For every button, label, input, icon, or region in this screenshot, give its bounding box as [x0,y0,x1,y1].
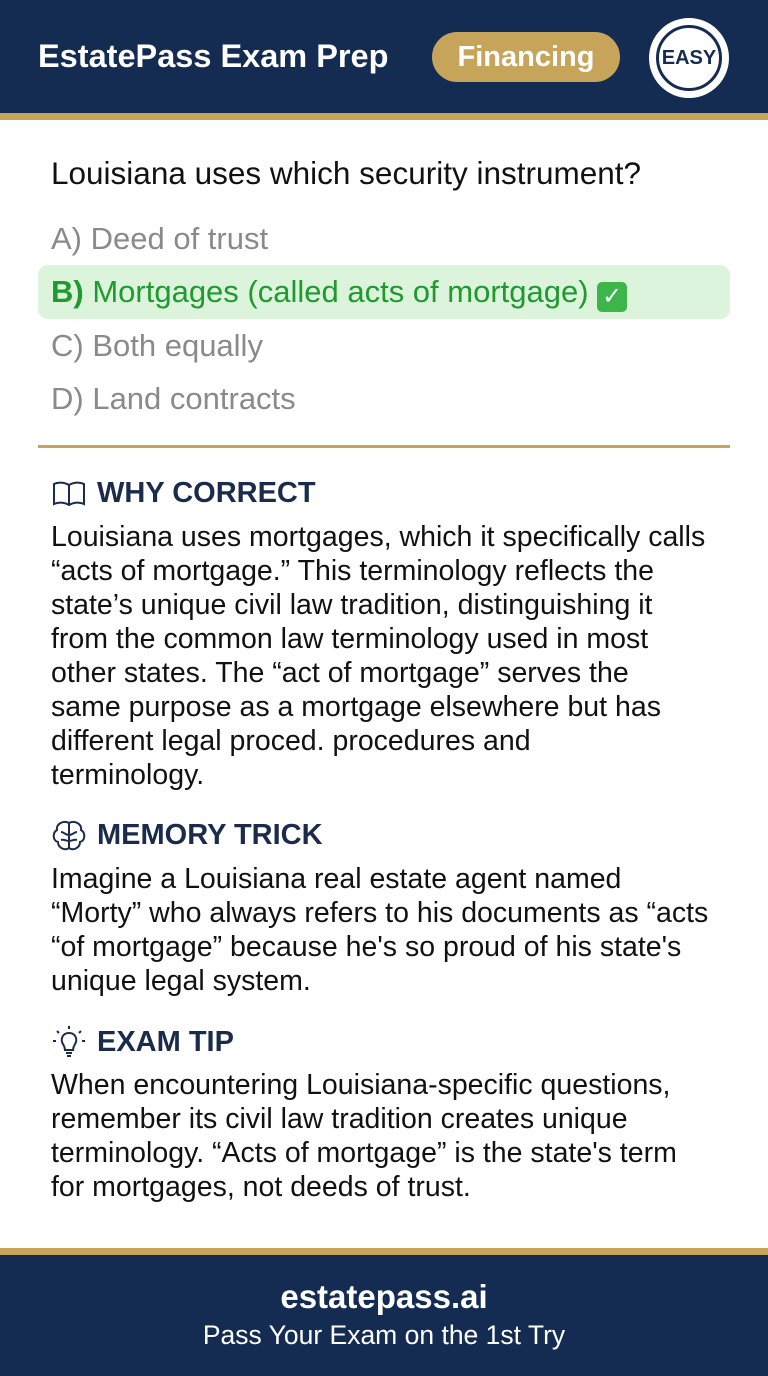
category pill [432,32,620,82]
footer tagline: Pass Your Exam on the 1st Try [203,1320,565,1350]
text: exam tip: for mortgages, not deeds of trust. [51,1171,471,1203]
text: exam tip [51,1069,677,1203]
text: memory trick [51,863,708,997]
text: why correct: other states. The “act of mortgage” serves the [51,657,629,689]
heading: memory trick: MEMORY TRICK [97,819,323,851]
text: why correct: “acts of mortgage.” This terminology reflects the [51,555,654,587]
option B correct [38,265,730,319]
text: why correct: different legal proced. procedures and [51,725,531,757]
option A: A) Deed of trust [51,221,268,256]
text: why correct: state’s unique civil law tradition, distinguishing it [51,589,652,621]
text: why correct: Louisiana uses mortgages, which it specifically calls [51,521,705,553]
text: why correct: same purpose as a mortgage elsewhere but has [51,691,661,723]
header bar [0,0,768,113]
text: exam tip: terminology. “Acts of mortgage” is the state's term [51,1137,677,1169]
text: ✓ [602,283,622,310]
text: exam tip: When encountering Louisiana-specific questions, [51,1069,670,1101]
difficulty badge [649,18,729,98]
option C: C) Both equally [51,328,263,363]
text: why correct: from the common law terminology used in most [51,623,648,655]
text: exam tip: remember its civil law tradition creates unique [51,1103,628,1135]
option D: D) Land contracts [51,381,296,416]
text: memory trick: Imagine a Louisiana real estate agent named [51,863,621,895]
text: memory trick: “Morty” who always refers to his documents as “acts [51,897,708,929]
heading: why correct: WHY CORRECT [97,477,316,509]
text: memory trick: unique legal system. [51,965,311,997]
category pill: Financing [458,41,594,73]
question: Louisiana uses which security instrument? [51,155,641,191]
footer [0,1255,768,1376]
text: memory trick: “of mortgage” because he's so proud of his state's [51,931,681,963]
text: why correct: terminology. [51,759,204,791]
heading: exam tip: EXAM TIP [97,1026,234,1058]
text: why correct [51,521,705,791]
difficulty badge: EASY [662,47,716,69]
title: EstatePass Exam Prep [38,38,388,74]
footer url: estatepass.ai [280,1278,488,1315]
text: B) Mortgages (called acts of mortgage) [51,274,589,309]
